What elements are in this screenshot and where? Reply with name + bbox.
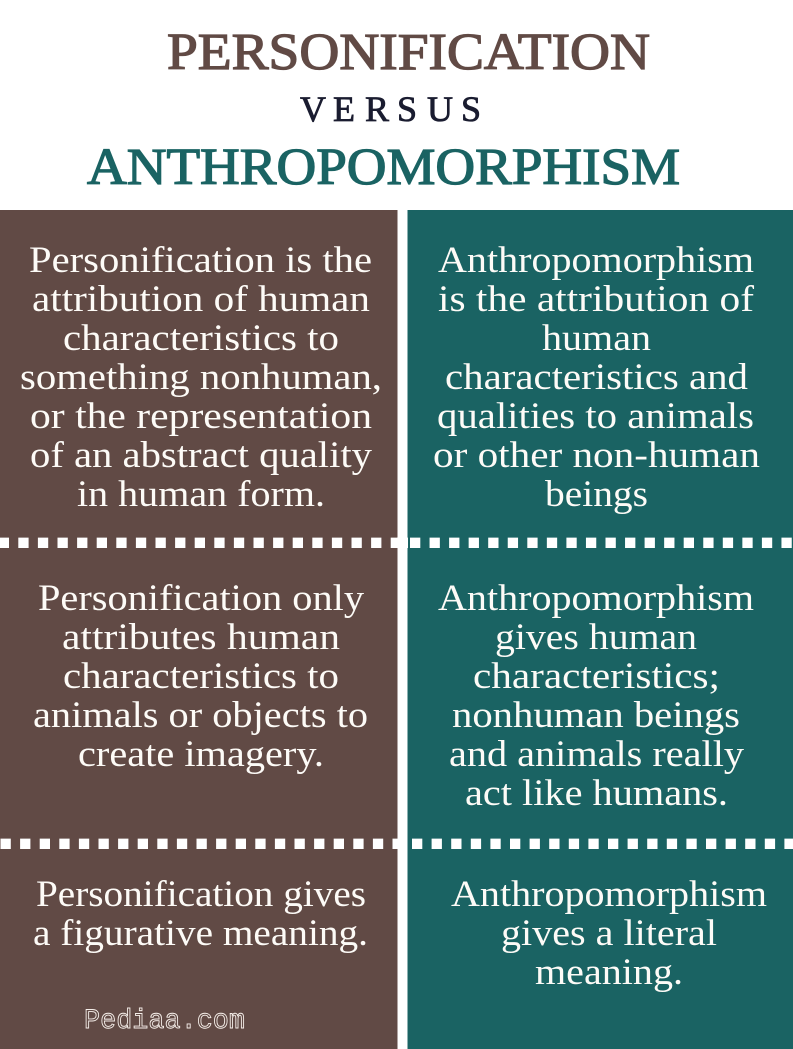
text: anthropomorphism definition: human [542,318,651,359]
heading: versus: VERSUS [300,89,481,129]
text: anthropomorphism behaviour: and animals really [449,734,745,775]
logo: Pediaa.com: Pediaa.com [84,1006,245,1037]
text: personification imagery: animals or objects to [33,695,368,736]
heading: personification: PERSONIFICATION [167,24,650,81]
text: anthropomorphism definition [433,240,760,515]
panel: personification column [0,210,398,1049]
panel: anthropomorphism column [408,210,793,1049]
text: anthropomorphism definition: or other non-human [433,435,760,476]
text: anthropomorphism definition: characteristics and [445,357,749,398]
text: personification definition: in human form. [77,474,325,515]
text: anthropomorphism meaning: meaning. [535,952,683,993]
text: personification meaning: Personification gives [36,874,366,915]
text: anthropomorphism meaning: Anthropomorphism [451,874,767,915]
text: personification imagery: Personification only [38,578,365,619]
text: personification definition: something nonhuman, [20,357,382,398]
text: personification definition: Personification is the [29,240,372,281]
text: anthropomorphism behaviour: gives human [495,617,697,658]
text: anthropomorphism meaning [451,874,767,993]
text: anthropomorphism behaviour [438,578,754,814]
text: personification imagery: attributes human [62,617,340,658]
text: personification definition [20,240,382,515]
text: personification imagery [33,578,368,775]
text: anthropomorphism meaning: gives a literal [501,913,717,954]
text: anthropomorphism definition: qualities to animals [437,396,754,437]
text: anthropomorphism definition: Anthropomorphism [438,240,754,281]
text: anthropomorphism definition: is the attribution of [438,279,755,320]
text: personification definition: characteristics to [63,318,339,359]
title [87,24,680,196]
text: personification meaning: a figurative meaning. [33,913,368,954]
text: personification definition: or the representation [30,396,372,437]
text: personification imagery: characteristics to [63,656,339,697]
text: anthropomorphism definition: beings [545,474,648,515]
text: anthropomorphism behaviour: act like humans. [465,773,728,814]
text: personification definition: attribution of human [32,279,370,320]
text: personification meaning [33,874,368,954]
heading: anthropomorphism: ANTHROPOMORPHISM [87,139,680,196]
text: anthropomorphism behaviour: characteristics; [473,656,720,697]
text: personification imagery: create imagery. [78,734,324,775]
text: anthropomorphism behaviour: nonhuman beings [452,695,740,736]
text: personification definition: of an abstract quality [30,435,373,476]
text: anthropomorphism behaviour: Anthropomorphism [438,578,754,619]
